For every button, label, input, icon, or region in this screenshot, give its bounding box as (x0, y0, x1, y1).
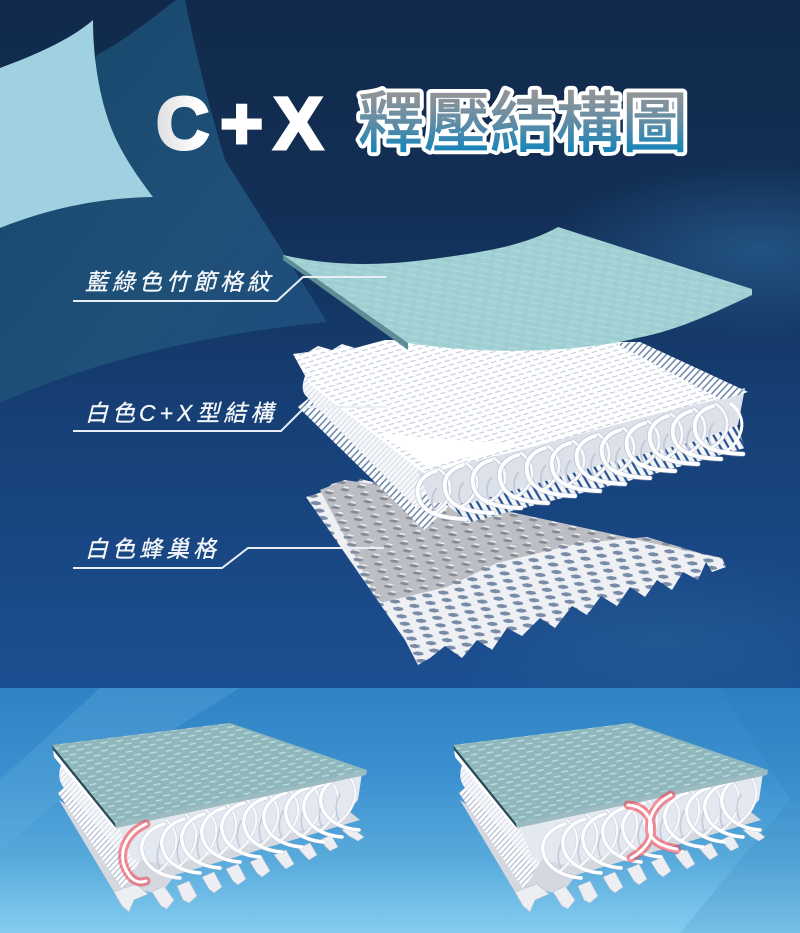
leader line 1 (73, 277, 386, 301)
top background (0, 0, 800, 688)
label: C+X structure (73, 400, 386, 431)
top sheet layer (283, 227, 752, 351)
leader line 2 (73, 407, 386, 431)
panel: C structure (52, 723, 367, 912)
sheet top face (283, 227, 752, 351)
C+X coil layer (293, 340, 748, 530)
front comb (298, 392, 450, 530)
label: honeycomb: 白色蜂巢格 (85, 536, 220, 562)
title chinese part: 釋壓結構圖 (358, 86, 688, 160)
lower comb behind coils (440, 420, 745, 522)
side drum (303, 362, 432, 510)
title chinese part: 釋壓結構圖 (358, 86, 688, 160)
X highlight (628, 795, 677, 858)
label: C+X structure: 白色C+X型結構 (85, 400, 277, 426)
C highlight (123, 824, 146, 882)
label: honeycomb (73, 536, 384, 568)
dark pillow (0, 0, 327, 403)
panel: X structure (453, 723, 768, 912)
bottom background (0, 688, 800, 933)
top comb surface (293, 340, 748, 474)
title latin part: C+X (156, 82, 323, 165)
pale pillow (0, 20, 153, 228)
teeth at back right (615, 342, 748, 400)
coil backing (418, 388, 745, 503)
label: bamboo grid (73, 269, 386, 301)
title (156, 82, 688, 165)
coils row (418, 403, 743, 519)
bright ridge (378, 433, 522, 466)
honeycomb layer (306, 479, 726, 665)
sheet side face (283, 255, 408, 350)
label: bamboo grid: 藍綠色竹節格紋 (85, 269, 274, 295)
leader line 3 (73, 548, 384, 568)
